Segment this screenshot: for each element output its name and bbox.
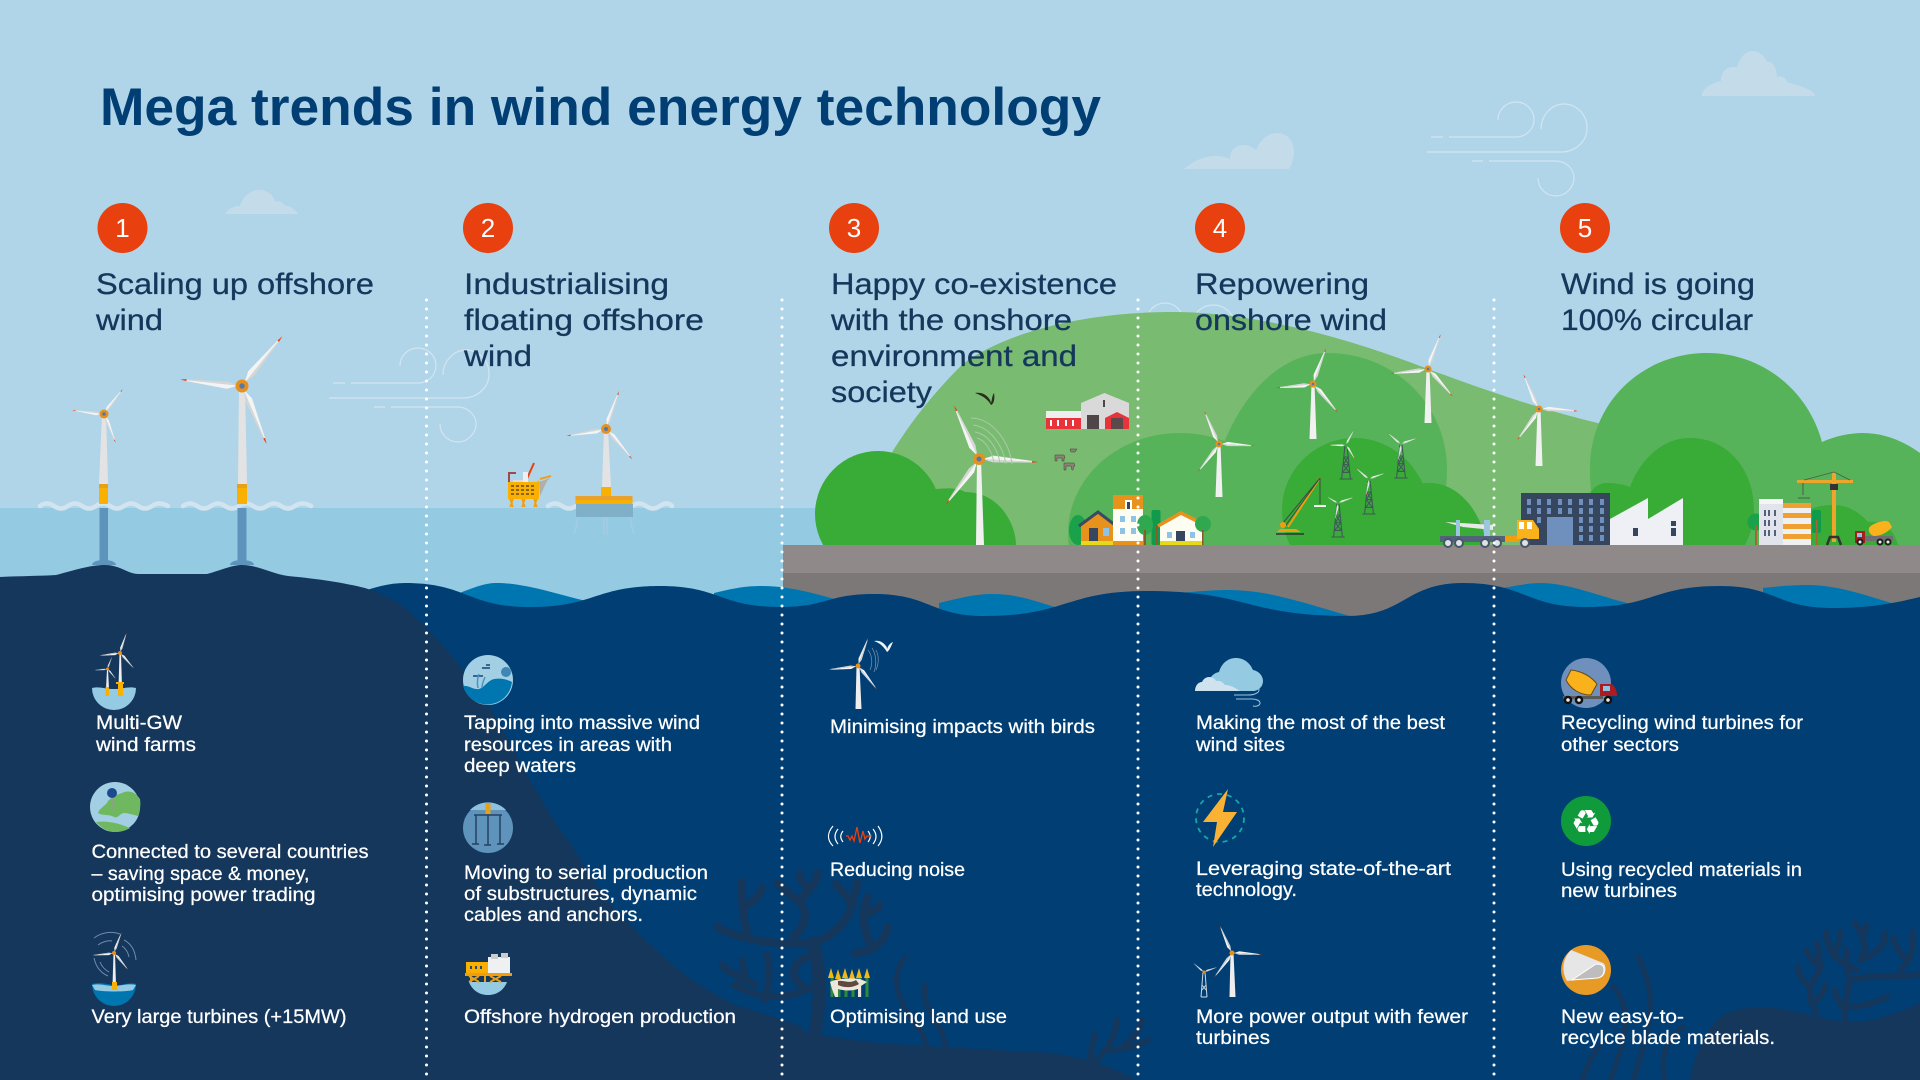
column 2 header [463, 203, 704, 373]
apartment tower [1113, 495, 1143, 509]
text: recycled materials [1561, 860, 1802, 902]
icon: mixer truck [1561, 658, 1617, 708]
icon: Europe globe [90, 782, 140, 832]
tower crane [1832, 472, 1836, 542]
light green hill [850, 312, 1640, 545]
text: very large turbines: Very large turbines (+15MW) [92, 1007, 346, 1028]
heading 5: Wind is going [1561, 268, 1755, 301]
text: deep waters: deep waters [464, 756, 576, 777]
heading 2: wind [463, 340, 532, 373]
column 1 header [95, 203, 374, 337]
heading 4: onshore wind [1195, 304, 1387, 337]
oil platform [508, 463, 551, 507]
icon: blade cross-section [1561, 945, 1611, 995]
heading 3: with the onshore [830, 304, 1072, 337]
text: recycling: other sectors [1561, 735, 1679, 756]
text: recycled materials: new turbines [1561, 881, 1677, 902]
heading 5 [1561, 268, 1755, 337]
text: recycling: Recycling wind turbines for [1561, 713, 1804, 734]
number badge 2: 2 [481, 213, 495, 243]
coral: right [1798, 923, 1920, 1022]
text: multi-GW [95, 713, 196, 756]
transport truck [1440, 520, 1539, 547]
hills [815, 312, 1920, 633]
icon: deep sea [463, 655, 513, 705]
heading 2: floating offshore [464, 304, 704, 337]
white house [1160, 512, 1202, 545]
icon: noise wave [828, 826, 882, 846]
text: blade materials: New easy-to- [1561, 1007, 1684, 1028]
seabed [0, 565, 1920, 1080]
icon: hydrogen platform [465, 953, 512, 995]
text: fewer turbines [1196, 1007, 1469, 1049]
text: serial production: cables and anchors. [464, 905, 643, 926]
number badge 4 [1195, 203, 1245, 253]
heading 4: Repowering [1195, 268, 1369, 301]
turbine: hill right [1390, 333, 1455, 423]
text: birds: Minimising impacts with birds [830, 717, 1095, 738]
dark green hills [815, 438, 1898, 577]
heading 1: wind [95, 304, 163, 337]
heading 3 [830, 268, 1117, 409]
wind swirls [329, 102, 1587, 442]
text: connected countries: Connected to several countries [92, 842, 368, 863]
seaweed: centre [897, 958, 945, 1050]
text: state of the art: technology. [1196, 880, 1297, 901]
heading 4 [1195, 268, 1387, 337]
number badge 4: 4 [1213, 213, 1227, 243]
text: connected countries [92, 842, 368, 906]
text: fewer turbines: turbines [1196, 1028, 1270, 1049]
text: multi-GW: Multi-GW [96, 713, 182, 734]
coral: centre [717, 873, 888, 1035]
village [1069, 495, 1211, 545]
text: serial production: of substructures, dynamic [464, 884, 697, 905]
barn [1046, 393, 1129, 429]
number badge 5 [1560, 203, 1610, 253]
ground [783, 545, 1920, 633]
tree [1748, 514, 1764, 530]
text: land use: Optimising land use [830, 1007, 1007, 1028]
turbine: near factory [1516, 374, 1578, 466]
column 5 header [1560, 203, 1755, 337]
mixer truck [1855, 531, 1865, 543]
bird [975, 393, 994, 405]
heading 2: Industrialising [464, 268, 669, 301]
coral: lower centre [1083, 1020, 1148, 1072]
deep sea [340, 583, 1920, 1080]
tall tree [1812, 510, 1821, 533]
cloud: top right [1702, 51, 1815, 96]
icon: lightning bolt [1196, 789, 1244, 847]
number badge 5: 5 [1578, 213, 1592, 243]
icon: recycle: ♻ [1571, 803, 1601, 843]
text: blade materials: recylce blade materials. [1561, 1028, 1775, 1049]
heading 5: 100% circular [1561, 304, 1753, 337]
text: best wind sites [1195, 713, 1446, 756]
text: deep waters: resources in areas with [464, 735, 672, 756]
icon: recycle [1561, 796, 1611, 846]
text: noise: Reducing noise [830, 860, 965, 881]
apartment [1759, 499, 1783, 545]
icon: turbine and bird [828, 637, 893, 709]
waterline foam [40, 504, 672, 508]
number badge 3: 3 [847, 213, 861, 243]
text: fewer turbines: More power output with fewer [1196, 1007, 1469, 1028]
icon: very large turbine [92, 932, 136, 1006]
icon: floating substructure [463, 802, 513, 853]
sawtooth halls [1610, 498, 1683, 545]
text: connected countries: optimising power trading [92, 885, 316, 906]
text: best wind sites: wind sites [1195, 735, 1285, 756]
number badge 1: 1 [115, 213, 130, 243]
sea surface [0, 508, 880, 638]
heading 1: Scaling up offshore [96, 268, 374, 301]
turbine: hill top centre [1276, 347, 1340, 439]
turbine: offshore small [72, 388, 124, 565]
text: state of the art [1196, 859, 1452, 901]
sound arcs [971, 418, 1012, 464]
seabed: left mound [0, 565, 1135, 1080]
corals and seaweed [717, 873, 1920, 1080]
lighter blue waves [457, 583, 1895, 630]
turbine: onshore foreground [943, 404, 1038, 545]
text: hydrogen: Offshore hydrogen production [464, 1007, 736, 1028]
crawler crane [1276, 478, 1326, 534]
number badge 1 [98, 203, 148, 253]
cloud: left [225, 190, 298, 214]
trees [1152, 510, 1160, 545]
turbine: floating [566, 390, 634, 535]
text: blade materials [1561, 1007, 1775, 1049]
text: serial production [464, 863, 708, 926]
text: multi-GW: wind farms [95, 735, 196, 756]
factory [1521, 493, 1683, 545]
cows [1055, 449, 1077, 470]
turbine: offshore large [180, 333, 285, 565]
heading 2 [463, 268, 704, 373]
text: serial production: Moving to serial production [464, 863, 708, 884]
text: recycled materials: Using recycled materials in [1561, 860, 1802, 881]
tree behind house [1069, 515, 1087, 545]
icon: big and small turbines [1193, 925, 1262, 997]
number badge 3 [829, 203, 879, 253]
column 4 header [1195, 203, 1387, 337]
text: deep waters [464, 713, 700, 777]
icon: cow in cornfield [828, 968, 870, 997]
column 3 header [829, 203, 1117, 409]
medium green hills [1068, 353, 1920, 633]
turbine: hill left [1197, 410, 1255, 497]
title: Mega trends in wind energy technology [100, 78, 1102, 137]
clouds [225, 51, 1815, 214]
seabed: right mound [1690, 1003, 1920, 1080]
lattice turbines [1326, 429, 1417, 537]
number badge 2 [463, 203, 513, 253]
text: recycling [1561, 713, 1804, 756]
orange house [1081, 513, 1113, 545]
seaweed: right [1582, 957, 1683, 1080]
heading 1 [95, 268, 374, 337]
icon: cloud with wind [1195, 658, 1263, 706]
heading 3: Happy co-existence [831, 268, 1117, 301]
construction site [1748, 472, 1893, 545]
text: state of the art: Leveraging state-of-the-art [1196, 859, 1452, 880]
heading 3: environment and [831, 340, 1077, 373]
column dividers [426, 300, 1494, 1080]
icon: multi-GW wind farm [92, 633, 136, 710]
heading 3: society [831, 376, 932, 409]
cloud: middle [1184, 133, 1294, 169]
text: connected countries: – saving space & money, [92, 864, 310, 885]
text: best wind sites: Making the most of the best [1196, 713, 1446, 734]
text: deep waters: Tapping into massive wind [464, 713, 700, 734]
